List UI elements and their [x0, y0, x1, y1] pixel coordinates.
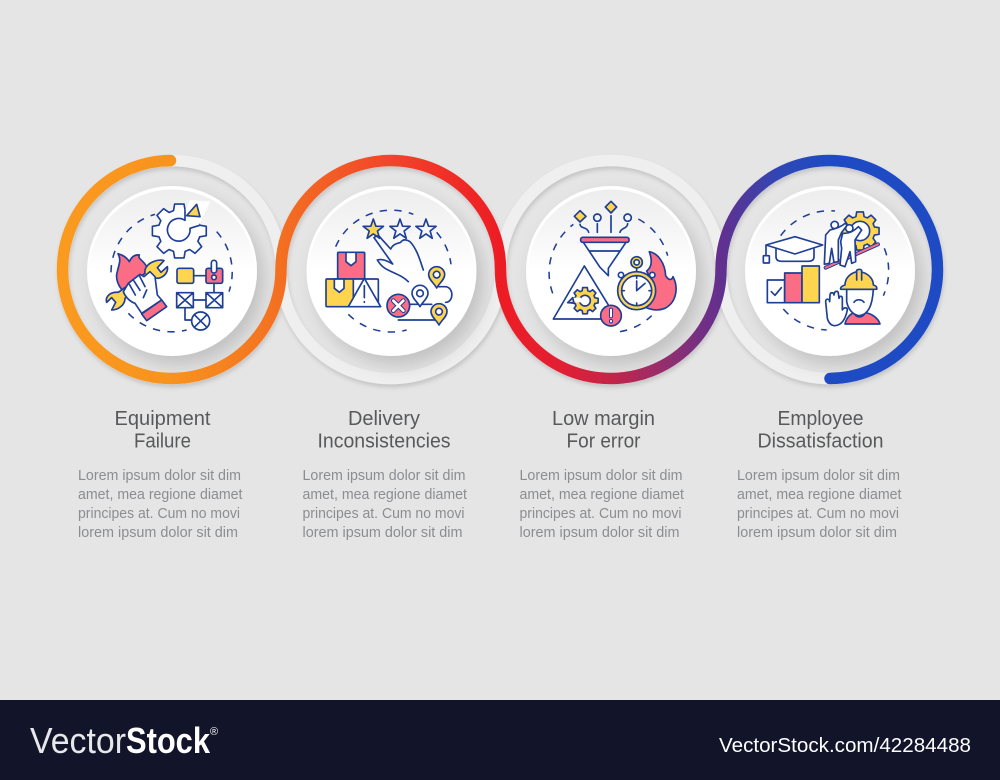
icon: small triangle [187, 204, 200, 217]
icon: stopwatch [618, 257, 656, 310]
body text: lorem ipsum dolor sit dim [302, 525, 462, 541]
image id: VectorStock.com/42284488 [719, 734, 971, 757]
icon: cancel mark [387, 294, 410, 317]
body text [302, 468, 467, 541]
light base rings [62, 160, 938, 378]
body text: Lorem ipsum dolor sit dim [78, 468, 241, 484]
body text: principes at. Cum no movi [737, 506, 899, 522]
icon: bar chart [767, 266, 819, 303]
heading: Equipment [114, 408, 211, 430]
icon: funnel [581, 237, 629, 276]
heading: Delivery [348, 408, 420, 430]
body text: amet, mea regione diamet [302, 487, 467, 503]
heading: Dissatisfaction [758, 430, 884, 452]
heading [758, 408, 884, 452]
icon: low margin for error [549, 201, 676, 332]
icon: small triangle [568, 298, 574, 303]
icon: gear [152, 200, 210, 258]
body text: principes at. Cum no movi [520, 506, 682, 522]
icon: boxes with warning [326, 252, 381, 307]
icon: employee dissatisfaction [763, 211, 889, 330]
white discs [87, 186, 915, 356]
body text: Lorem ipsum dolor sit dim [520, 468, 682, 484]
icon: route [398, 287, 452, 320]
heading: Inconsistencies [318, 430, 450, 452]
icon: delivery inconsistencies [326, 210, 452, 332]
icon: plank [826, 244, 878, 268]
body text: amet, mea regione diamet [78, 487, 242, 503]
body text [737, 468, 902, 541]
footer bar [0, 700, 1000, 780]
icon: equipment failure [106, 200, 232, 332]
heading: For error [566, 430, 641, 452]
icon: inputs above funnel [574, 201, 631, 232]
icon: stop hand [826, 291, 847, 326]
body text: amet, mea regione diamet [737, 487, 902, 503]
heading: Employee [778, 408, 864, 430]
icon: wrench [106, 260, 168, 310]
heading: Low margin [552, 408, 655, 430]
body text [520, 468, 684, 541]
icon: flowchart [177, 260, 223, 330]
heading [318, 408, 450, 452]
body text: lorem ipsum dolor sit dim [737, 525, 897, 541]
heading [114, 408, 211, 452]
gradient flow line [62, 160, 937, 378]
body text: amet, mea regione diamet [520, 487, 684, 503]
icon: fist [123, 272, 162, 313]
icon: pointing hand [374, 236, 423, 282]
column: delivery inconsistencies [302, 408, 467, 541]
heading: Failure [134, 430, 191, 452]
VectorStock logo: Stock [126, 720, 211, 761]
icon: sleeve [142, 300, 167, 321]
icon: yellow gear [571, 288, 598, 314]
body text: Lorem ipsum dolor sit dim [737, 468, 900, 484]
icon: graduation cap [763, 237, 823, 263]
body text: lorem ipsum dolor sit dim [78, 525, 238, 541]
column: equipment failure [78, 408, 242, 541]
icon: flame [117, 254, 149, 295]
body text: lorem ipsum dolor sit dim [520, 525, 680, 541]
icon: stars [363, 219, 436, 238]
body text [78, 468, 242, 541]
icon: workers pushing gear [824, 221, 862, 267]
heading [552, 408, 655, 452]
icon: location pins [412, 267, 447, 325]
body text: Lorem ipsum dolor sit dim [302, 468, 466, 484]
VectorStock logo [30, 720, 218, 761]
icon: worker in helmet [841, 269, 880, 324]
column: employee dissatisfaction [737, 408, 902, 541]
icon: alert badge [601, 305, 621, 326]
body text: principes at. Cum no movi [78, 506, 240, 522]
VectorStock logo: Vector [30, 720, 126, 761]
VectorStock logo: ® [210, 726, 218, 738]
body text: principes at. Cum no movi [302, 506, 464, 522]
icon: flame [646, 252, 676, 310]
icon: large gear [841, 212, 879, 250]
icon: warning triangle [553, 266, 608, 319]
column: low margin for error [520, 408, 684, 541]
